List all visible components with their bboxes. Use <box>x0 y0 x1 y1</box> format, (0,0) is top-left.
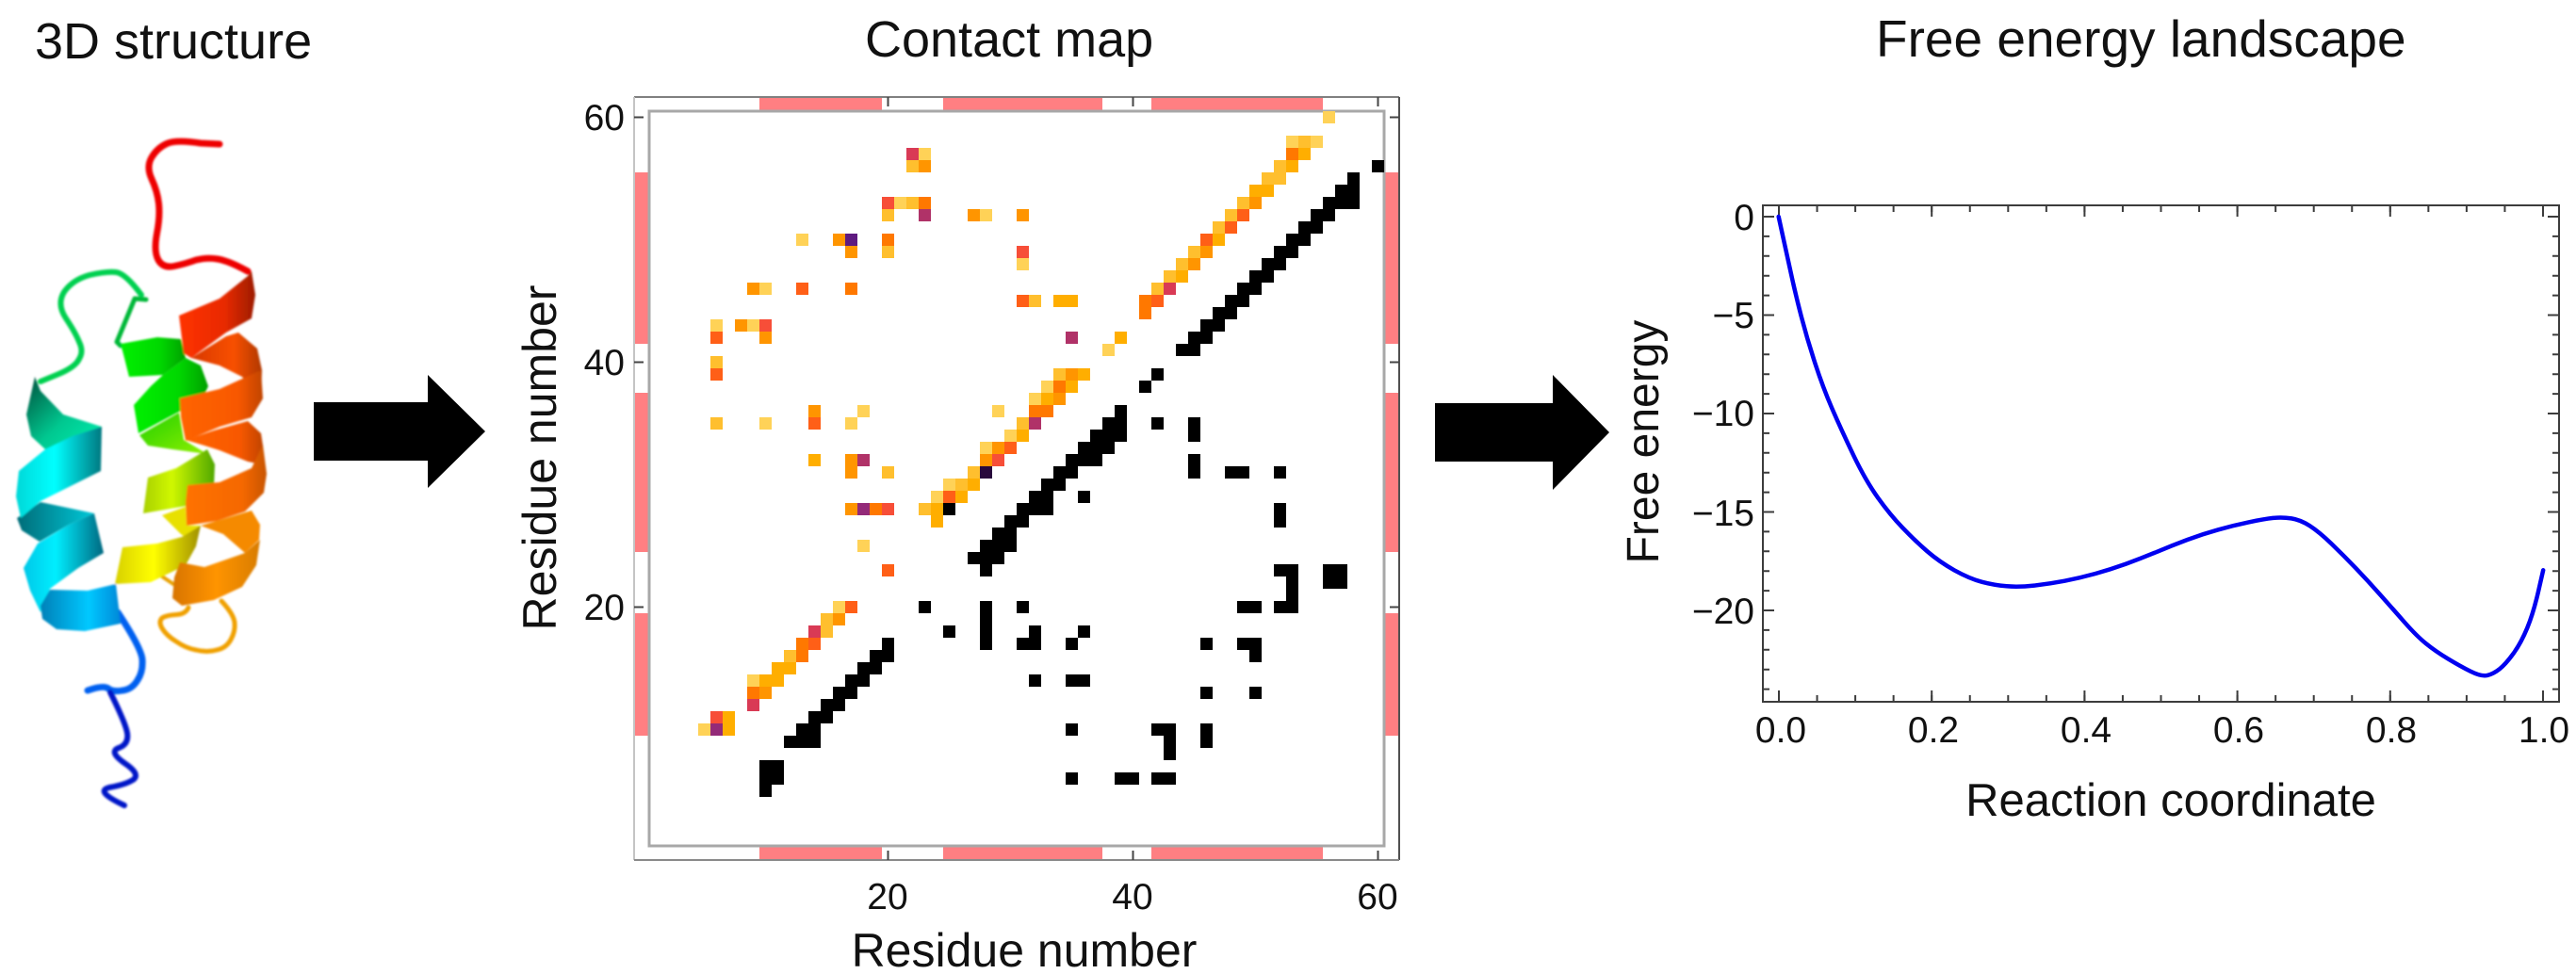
y-axis title: Residue number <box>514 285 566 630</box>
x-axis tick labels: 0.8 <box>2366 710 2417 751</box>
y-axis tick labels: 40 <box>584 343 625 383</box>
arrow: contact map to free energy <box>1435 375 1609 490</box>
x-axis title: Reaction coordinate <box>1965 775 2376 826</box>
title: Free energy landscape: Free energy landscape <box>1876 9 2406 68</box>
panel: protein ribbon 3D structure <box>16 141 267 805</box>
y-axis tick labels: 60 <box>584 98 625 138</box>
x-axis tick labels: 40 <box>1112 877 1153 917</box>
y-axis title: Free energy <box>1619 320 1669 563</box>
x-axis tick labels: 20 <box>867 877 908 917</box>
x-axis tick labels: 60 <box>1357 877 1398 917</box>
x-axis tick labels <box>1755 710 2569 751</box>
title: 3D structure: 3D structure <box>35 13 312 70</box>
free energy curve <box>1779 217 2543 675</box>
y-axis tick labels <box>1692 198 1754 632</box>
x-axis tick labels: 0.4 <box>2061 710 2111 751</box>
title: Contact map: Contact map <box>865 11 1153 68</box>
x-axis tick labels: 1.0 <box>2519 710 2569 751</box>
chart: free energy landscape <box>1619 198 2569 826</box>
simulated contacts, upper triangle <box>698 111 1335 736</box>
y-axis tick labels: −20 <box>1692 592 1754 632</box>
y-axis tick labels: −5 <box>1713 296 1754 336</box>
coloured bands: secondary structure <box>634 97 1399 860</box>
x-axis tick labels: 0.2 <box>1908 710 1959 751</box>
x-axis tick labels: 0.0 <box>1755 710 1806 751</box>
y-axis tick labels <box>584 98 625 628</box>
y-axis tick labels: −10 <box>1692 394 1754 434</box>
y-axis tick labels: 20 <box>584 588 625 628</box>
x-axis tick labels: 0.6 <box>2213 710 2264 751</box>
x-axis tick labels <box>867 877 1398 917</box>
arrow: structure to contact map <box>314 375 485 488</box>
native contacts, lower triangle <box>759 160 1384 797</box>
y-axis tick labels: −15 <box>1692 494 1754 534</box>
y-axis tick labels: 0 <box>1734 198 1754 238</box>
chart: contact map <box>514 97 1399 974</box>
